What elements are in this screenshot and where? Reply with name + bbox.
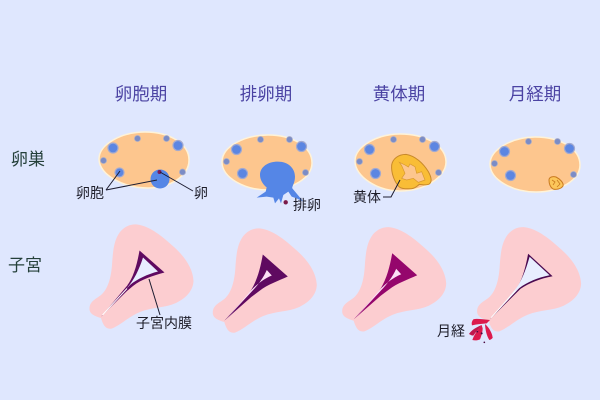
endometrium label: 子宮内膜 (136, 315, 192, 331)
menstrual blood (469, 319, 493, 343)
heading: follicular phase: 卵胞期 (115, 84, 167, 104)
heading: ovulation phase: 排卵期 (240, 84, 292, 104)
uterus: ovulation phase (213, 228, 317, 333)
uterus: menstrual phase (477, 227, 581, 331)
ovary: menstrual phase (490, 137, 580, 192)
uterus: luteal phase (342, 227, 446, 331)
label: egg: 卵 (194, 185, 208, 201)
label: follicle: 卵胞 (76, 185, 104, 201)
burst follicle (257, 162, 303, 203)
label: menstruation: 月経 (437, 323, 465, 339)
ovary: follicular phase (76, 132, 208, 201)
label: ovulation: 排卵 (293, 197, 321, 213)
label: corpus luteum: 黄体 (353, 189, 381, 205)
row label: ovary: 卵巣 (11, 150, 45, 169)
small corpus albicans (549, 177, 563, 189)
heading: menstrual phase: 月経期 (509, 84, 561, 104)
row label: uterus: 子宮 (8, 256, 42, 275)
ovary: luteal phase (353, 134, 446, 205)
ovary: ovulation phase (222, 135, 321, 213)
heading: luteal phase: 黄体期 (373, 84, 425, 104)
corpus luteum (392, 154, 431, 189)
uterus: follicular phase (89, 224, 194, 331)
